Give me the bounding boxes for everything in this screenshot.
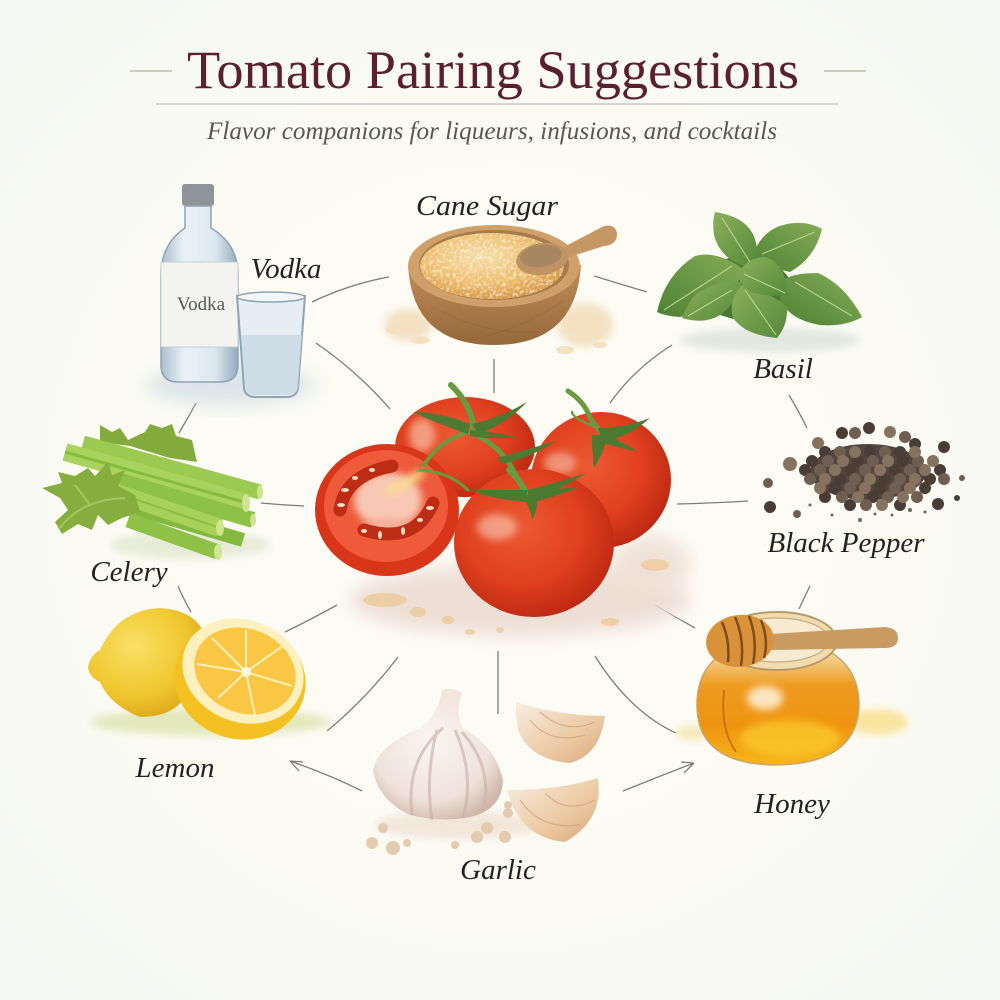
title: Tomato Pairing Suggestions (187, 40, 799, 100)
label: Celery: Celery (90, 556, 168, 588)
front tomato (454, 469, 614, 617)
icon: honey jar with dipper (676, 612, 908, 765)
label: Vodka: Vodka (251, 253, 321, 285)
icon: garlic (366, 689, 605, 855)
icon: celery (42, 424, 270, 560)
tomato stems (413, 385, 650, 520)
label: Lemon: Lemon (135, 752, 214, 784)
label: Honey: Honey (753, 788, 830, 820)
icon: basil leaves (657, 212, 862, 352)
cut tomato (315, 444, 459, 576)
illustration: central tomatoes (315, 385, 690, 636)
label: Basil: Basil (753, 353, 813, 385)
label: Cane Sugar: Cane Sugar (416, 190, 559, 222)
icon: lemons (88, 600, 330, 754)
back left tomato (395, 397, 535, 497)
icon: bowl of cane sugar (384, 225, 617, 354)
label: Garlic: Garlic (460, 854, 536, 886)
label: Black Pepper: Black Pepper (768, 527, 925, 559)
back right tomato (531, 412, 671, 548)
subtitle: Flavor companions for liqueurs, infusions, and cocktails (206, 118, 777, 145)
icon: vodka bottle and glass (145, 184, 315, 405)
icon: vodka bottle and glass: Vodka (177, 294, 226, 315)
connector lines (178, 276, 810, 791)
icon: black peppercorns (763, 422, 965, 522)
